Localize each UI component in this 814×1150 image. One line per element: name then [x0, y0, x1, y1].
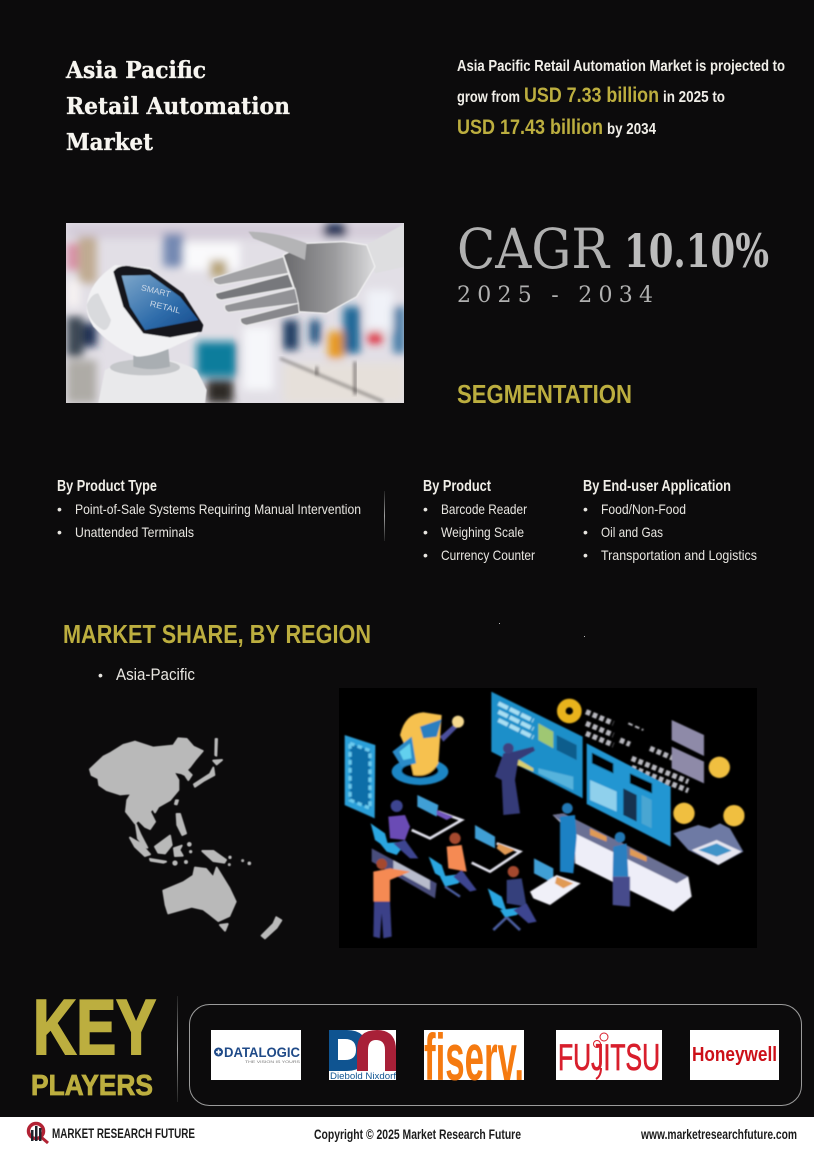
CAGR value: 10.10%	[624, 224, 769, 278]
robot head	[87, 265, 203, 357]
robot	[392, 758, 448, 785]
seated worker 1	[371, 823, 389, 850]
logo: datalogic: DATALOGIC	[224, 1044, 300, 1060]
gear	[561, 703, 577, 719]
main wall screen	[491, 692, 583, 798]
title: Asia Pacific	[65, 57, 206, 84]
segment: by product type: Unattended Terminals	[75, 524, 194, 540]
logo: fujitsu	[556, 1030, 662, 1080]
copyright: Copyright © 2025 Market Research Future	[314, 1127, 521, 1142]
segment: by product: By Product	[423, 478, 491, 495]
segment: by end-user application: •	[583, 547, 588, 563]
photo: smart retail robot and robotic hand: RETAIL	[149, 298, 182, 316]
boxes and stairs on right	[673, 803, 695, 824]
key players heading: KEY	[33, 983, 156, 1071]
shelf and standing worker	[372, 848, 437, 898]
segment: by product: •	[423, 547, 428, 563]
footer logo	[28, 1124, 195, 1143]
robot screen	[113, 266, 203, 337]
market projection text	[457, 58, 785, 139]
footer	[0, 1117, 814, 1150]
key players panel	[190, 1004, 802, 1106]
left tablet	[345, 735, 375, 818]
market projection text: by 2034	[607, 121, 656, 138]
segment: by product type	[57, 478, 361, 540]
seated worker 3	[488, 888, 507, 912]
segment: by product type: By Product Type	[57, 478, 157, 495]
segment: by end-user application: •	[583, 501, 588, 517]
robotic hand	[213, 223, 405, 325]
robot body	[87, 265, 207, 403]
market projection text: USD 17.43 billion	[457, 116, 603, 139]
segment: by end-user application: Food/Non-Food	[601, 501, 686, 517]
title: Retail Automation	[66, 93, 290, 120]
segment: by end-user application: Oil and Gas	[601, 524, 663, 540]
segment: by end-user application: Transportation and Logistics	[601, 547, 757, 563]
presenter	[495, 747, 535, 815]
photo: smart retail robot and robotic hand	[66, 223, 405, 403]
segment: by product type: •	[57, 524, 62, 540]
blurred store background	[67, 223, 405, 403]
logo: honeywell	[690, 1030, 779, 1080]
segment: by product: Weighing Scale	[441, 524, 524, 540]
CAGR period: 2025 - 2034	[457, 283, 653, 308]
segment: by end-user application	[583, 478, 757, 563]
market projection text: USD 7.33 billion	[524, 84, 659, 107]
segment: by product	[423, 478, 535, 563]
footer logo: MARKET RESEARCH FUTURE	[52, 1126, 195, 1141]
illustration: retail automation isometric scene	[339, 688, 757, 948]
market projection text: in 2025 to	[663, 89, 725, 106]
CAGR value: CAGR	[457, 217, 610, 281]
data panels	[586, 712, 688, 791]
segment: by product: •	[423, 524, 428, 540]
region list: •	[98, 667, 103, 683]
segment: by product: Barcode Reader	[441, 501, 527, 517]
segment: by end-user application: •	[583, 524, 588, 540]
logo: fiserv	[424, 1020, 524, 1094]
market share heading: MARKET SHARE, BY REGION	[63, 621, 371, 649]
title: Market	[66, 129, 153, 156]
logo: fujitsu: FUJITSU	[558, 1037, 660, 1078]
segment: by product: Currency Counter	[441, 547, 535, 563]
segment: by end-user application: By End-user Application	[583, 478, 731, 495]
CAGR value	[457, 217, 769, 281]
key players heading: PLAYERS	[31, 1070, 153, 1102]
second wall screen	[587, 743, 671, 847]
segment: by product type: •	[57, 501, 62, 517]
map: asia pacific	[90, 738, 281, 938]
title	[65, 57, 290, 156]
logo: diebold nixdorf	[329, 1030, 397, 1081]
market projection text: grow from	[457, 89, 520, 106]
conveyor	[553, 813, 692, 912]
logo: datalogic: THE VISION IS YOURS	[245, 1060, 301, 1064]
segment: by product type: Point-of-Sale Systems Requiring Manual Intervention	[75, 501, 361, 517]
logo: datalogic	[211, 1030, 301, 1080]
seated worker 2	[429, 857, 447, 880]
logo: honeywell: Honeywell	[692, 1044, 777, 1066]
logo: diebold nixdorf: Diebold Nixdorf	[330, 1071, 397, 1081]
logo: fiserv: fiserv.	[424, 1020, 524, 1094]
segment: by product: •	[423, 501, 428, 517]
segmentation heading: SEGMENTATION	[457, 381, 632, 409]
key players heading	[31, 983, 156, 1102]
operators at conveyor	[560, 815, 577, 873]
photo: smart retail robot and robotic hand: SMART	[140, 282, 172, 299]
region list: Asia-Pacific	[116, 666, 195, 684]
